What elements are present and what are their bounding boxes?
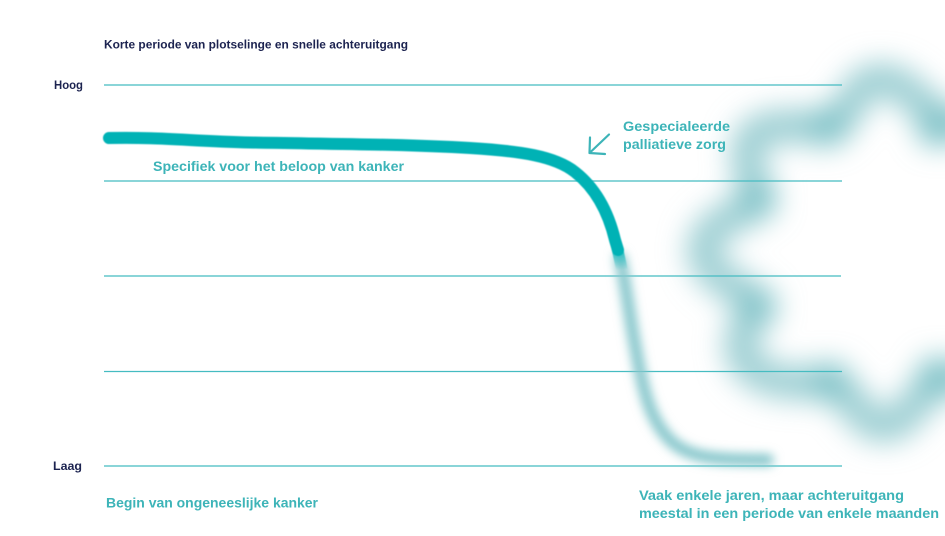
horizontal grid lines: [104, 85, 842, 466]
x-axis label: duration: Vaak enkele jaren, maar achteruitgang: [639, 487, 904, 503]
callout: specialised palliative care: [623, 118, 730, 152]
blurred background shape: [704, 80, 945, 425]
blurred tail of the curve: [620, 258, 768, 460]
x-axis label: duration: [639, 487, 939, 521]
curve label: Specifiek voor het beloop van kanker: [153, 158, 405, 174]
heading: Korte periode van plotselinge en snelle achteruitgang: [104, 40, 408, 52]
axis label: high: Hoog: [54, 80, 83, 92]
main decline curve: [109, 138, 622, 270]
x-axis label: start: Begin van ongeneeslijke kanker: [106, 494, 319, 510]
icon: arrow: [590, 134, 609, 154]
callout: specialised palliative care: palliatieve zorg: [623, 136, 726, 152]
x-axis label: duration: meestal in een periode van enkele maanden: [639, 505, 939, 521]
axis label: low: Laag: [53, 461, 82, 473]
callout: specialised palliative care: Gespecialeerde: [623, 118, 730, 134]
